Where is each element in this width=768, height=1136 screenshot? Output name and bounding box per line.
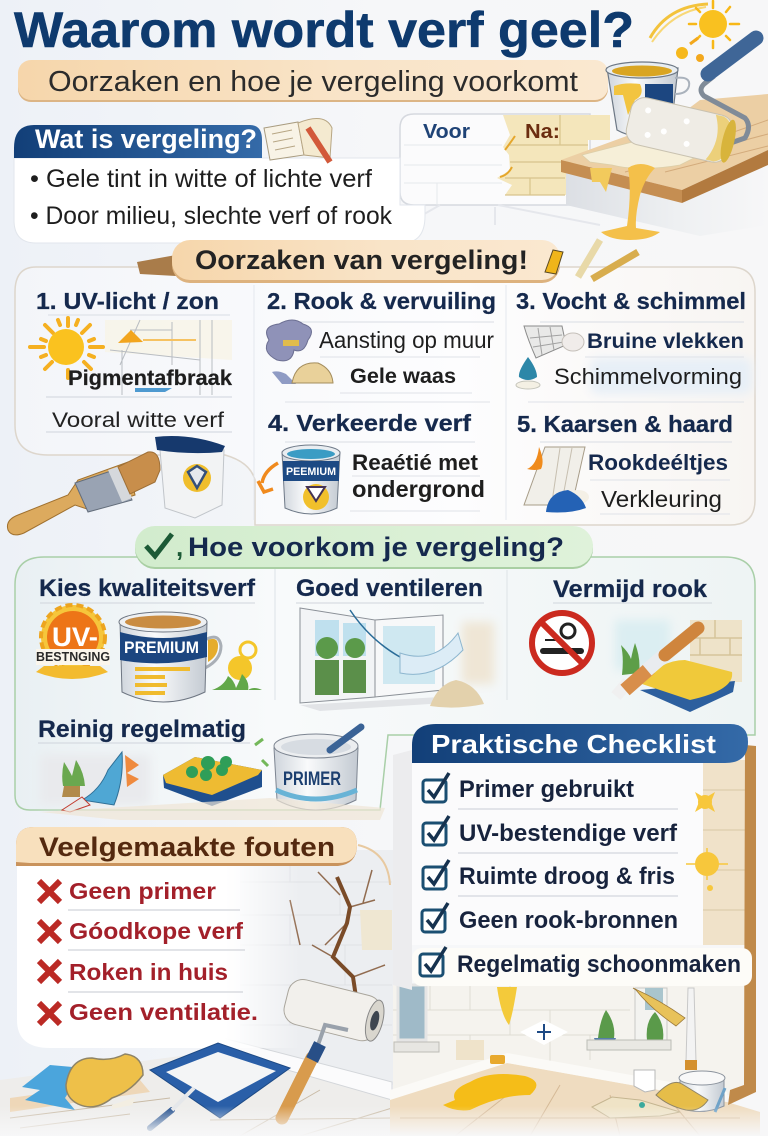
checklist: Ruimte droog & fris	[459, 863, 675, 890]
checklist: UV-bestendige verf	[459, 820, 678, 847]
primer can	[255, 727, 361, 810]
heading banner: Oorzaken van vergeling	[137, 240, 638, 283]
cause 1: 1. UV-licht / zon	[36, 288, 219, 314]
mistake list: Góodkope verf	[69, 918, 243, 944]
panel: Praktische Checklist	[393, 724, 756, 1105]
icon: sun top right	[650, 1, 739, 62]
panel: Hoe voorkom je vergeling	[15, 557, 755, 812]
cause 5	[517, 411, 733, 514]
cause 5: Verkleuring	[601, 486, 722, 512]
checklist	[412, 773, 752, 986]
tip: kies kwaliteitsverf: PREMIUM	[124, 638, 199, 657]
illustration: sponge, tray and roller	[22, 976, 388, 1128]
panel: Wat is vergeling	[14, 119, 425, 243]
tip: reinig regelmatig	[38, 716, 262, 812]
cause 2: Gele waas	[350, 365, 456, 388]
tip: reinig regelmatig: Reinig regelmatig	[38, 716, 246, 743]
badge: UV-bestendig: UV-	[52, 622, 98, 652]
tip: kies kwaliteitsverf	[36, 575, 262, 702]
sun sparkles	[686, 792, 728, 891]
cause 3: Schimmelvorming	[554, 364, 742, 389]
cause 3	[516, 288, 752, 402]
cause 4: Reaétié met	[352, 450, 479, 475]
mistake list: Geen ventilatie.	[69, 999, 258, 1025]
panel: Oorzaken van vergeling	[15, 267, 755, 525]
cause 1: Vooral witte verf	[52, 408, 224, 432]
panel: Veelgemaakte fouten	[16, 827, 357, 1048]
panel: Wat is vergeling: Wat is vergeling?	[35, 124, 257, 154]
tip: kies kwaliteitsverf: Kies kwaliteitsverf	[39, 575, 256, 602]
illustration: room scene below checklist	[390, 985, 760, 1136]
text: Voor and Na labels: Na:	[525, 121, 560, 143]
icon: paper and brush	[264, 119, 332, 162]
cause 2	[266, 288, 496, 402]
illustration: paint can, roller and table	[561, 38, 768, 240]
subtitle banner	[18, 60, 608, 102]
cause 4: 4. Verkeerde verf	[268, 410, 471, 436]
tip: goed ventileren	[296, 575, 494, 711]
heading banner: Hoe voorkom je vergeling: ,	[176, 532, 183, 562]
checklist: Geen rook-bronnen	[459, 907, 678, 934]
illustration: crack	[290, 870, 385, 997]
header	[412, 724, 748, 763]
cause 1	[30, 288, 232, 432]
cause 4: ondergrond	[352, 476, 485, 502]
heading	[16, 827, 357, 866]
illustration: bottom left wall and floor	[0, 845, 393, 1136]
cause 5: 5. Kaarsen & haard	[517, 411, 733, 437]
cause 3: Bruine vlekken	[587, 330, 744, 353]
illustration: before and after wall	[400, 114, 610, 225]
heading banner: Oorzaken van vergeling: Oorzaken van vergeling!	[195, 245, 528, 275]
heading banner: Hoe voorkom je vergeling	[135, 526, 593, 569]
cause 3: 3. Vocht & schimmel	[516, 288, 746, 314]
badge: UV-bestendig	[36, 605, 110, 679]
text: Voor and Na labels	[423, 121, 560, 143]
primer can: PRIMER	[283, 769, 341, 790]
cause 5: Rookdeéltjes	[588, 450, 728, 475]
mistake list: Geen primer	[69, 878, 216, 904]
checklist: Primer gebruikt	[459, 776, 634, 803]
header: Praktische Checklist	[431, 729, 716, 759]
cause 2: Aansting op muur	[319, 327, 494, 353]
tip: vermijd rook	[532, 576, 742, 712]
panel: Wat is vergeling: • Door milieu, slechte verf of rook	[30, 202, 392, 230]
cause 1: Pigmentafbraak	[68, 367, 232, 390]
illustration: brush and paint bucket	[7, 436, 225, 535]
heading: Veelgemaakte fouten	[39, 832, 335, 862]
icon: check mark	[146, 534, 172, 556]
mistake list	[39, 878, 258, 1025]
illustration: wood floor under tips	[40, 798, 385, 820]
badge: UV-bestendig: BESTNGING	[36, 650, 110, 664]
cause 4	[258, 410, 485, 514]
text: Voor and Na labels: Voor	[423, 121, 470, 143]
checklist: Regelmatig schoonmaken	[457, 951, 741, 978]
bottom edge fade	[0, 1106, 768, 1136]
tip: vermijd rook: Vermijd rook	[553, 576, 708, 603]
title: Waarom wordt verf geel?	[14, 2, 634, 58]
subtitle banner: Oorzaken en hoe je vergeling voorkomt	[48, 66, 578, 98]
tip: goed ventileren: Goed ventileren	[296, 575, 483, 602]
heading banner: Hoe voorkom je vergeling: Hoe voorkom je vergeling?	[188, 532, 564, 562]
mistake list: Roken in huis	[69, 959, 228, 985]
panel: Wat is vergeling: • Gele tint in witte of lichte verf	[30, 165, 372, 193]
cause 4: PEEMIUM	[286, 466, 336, 478]
cause 2: 2. Rook & vervuiling	[267, 288, 496, 314]
